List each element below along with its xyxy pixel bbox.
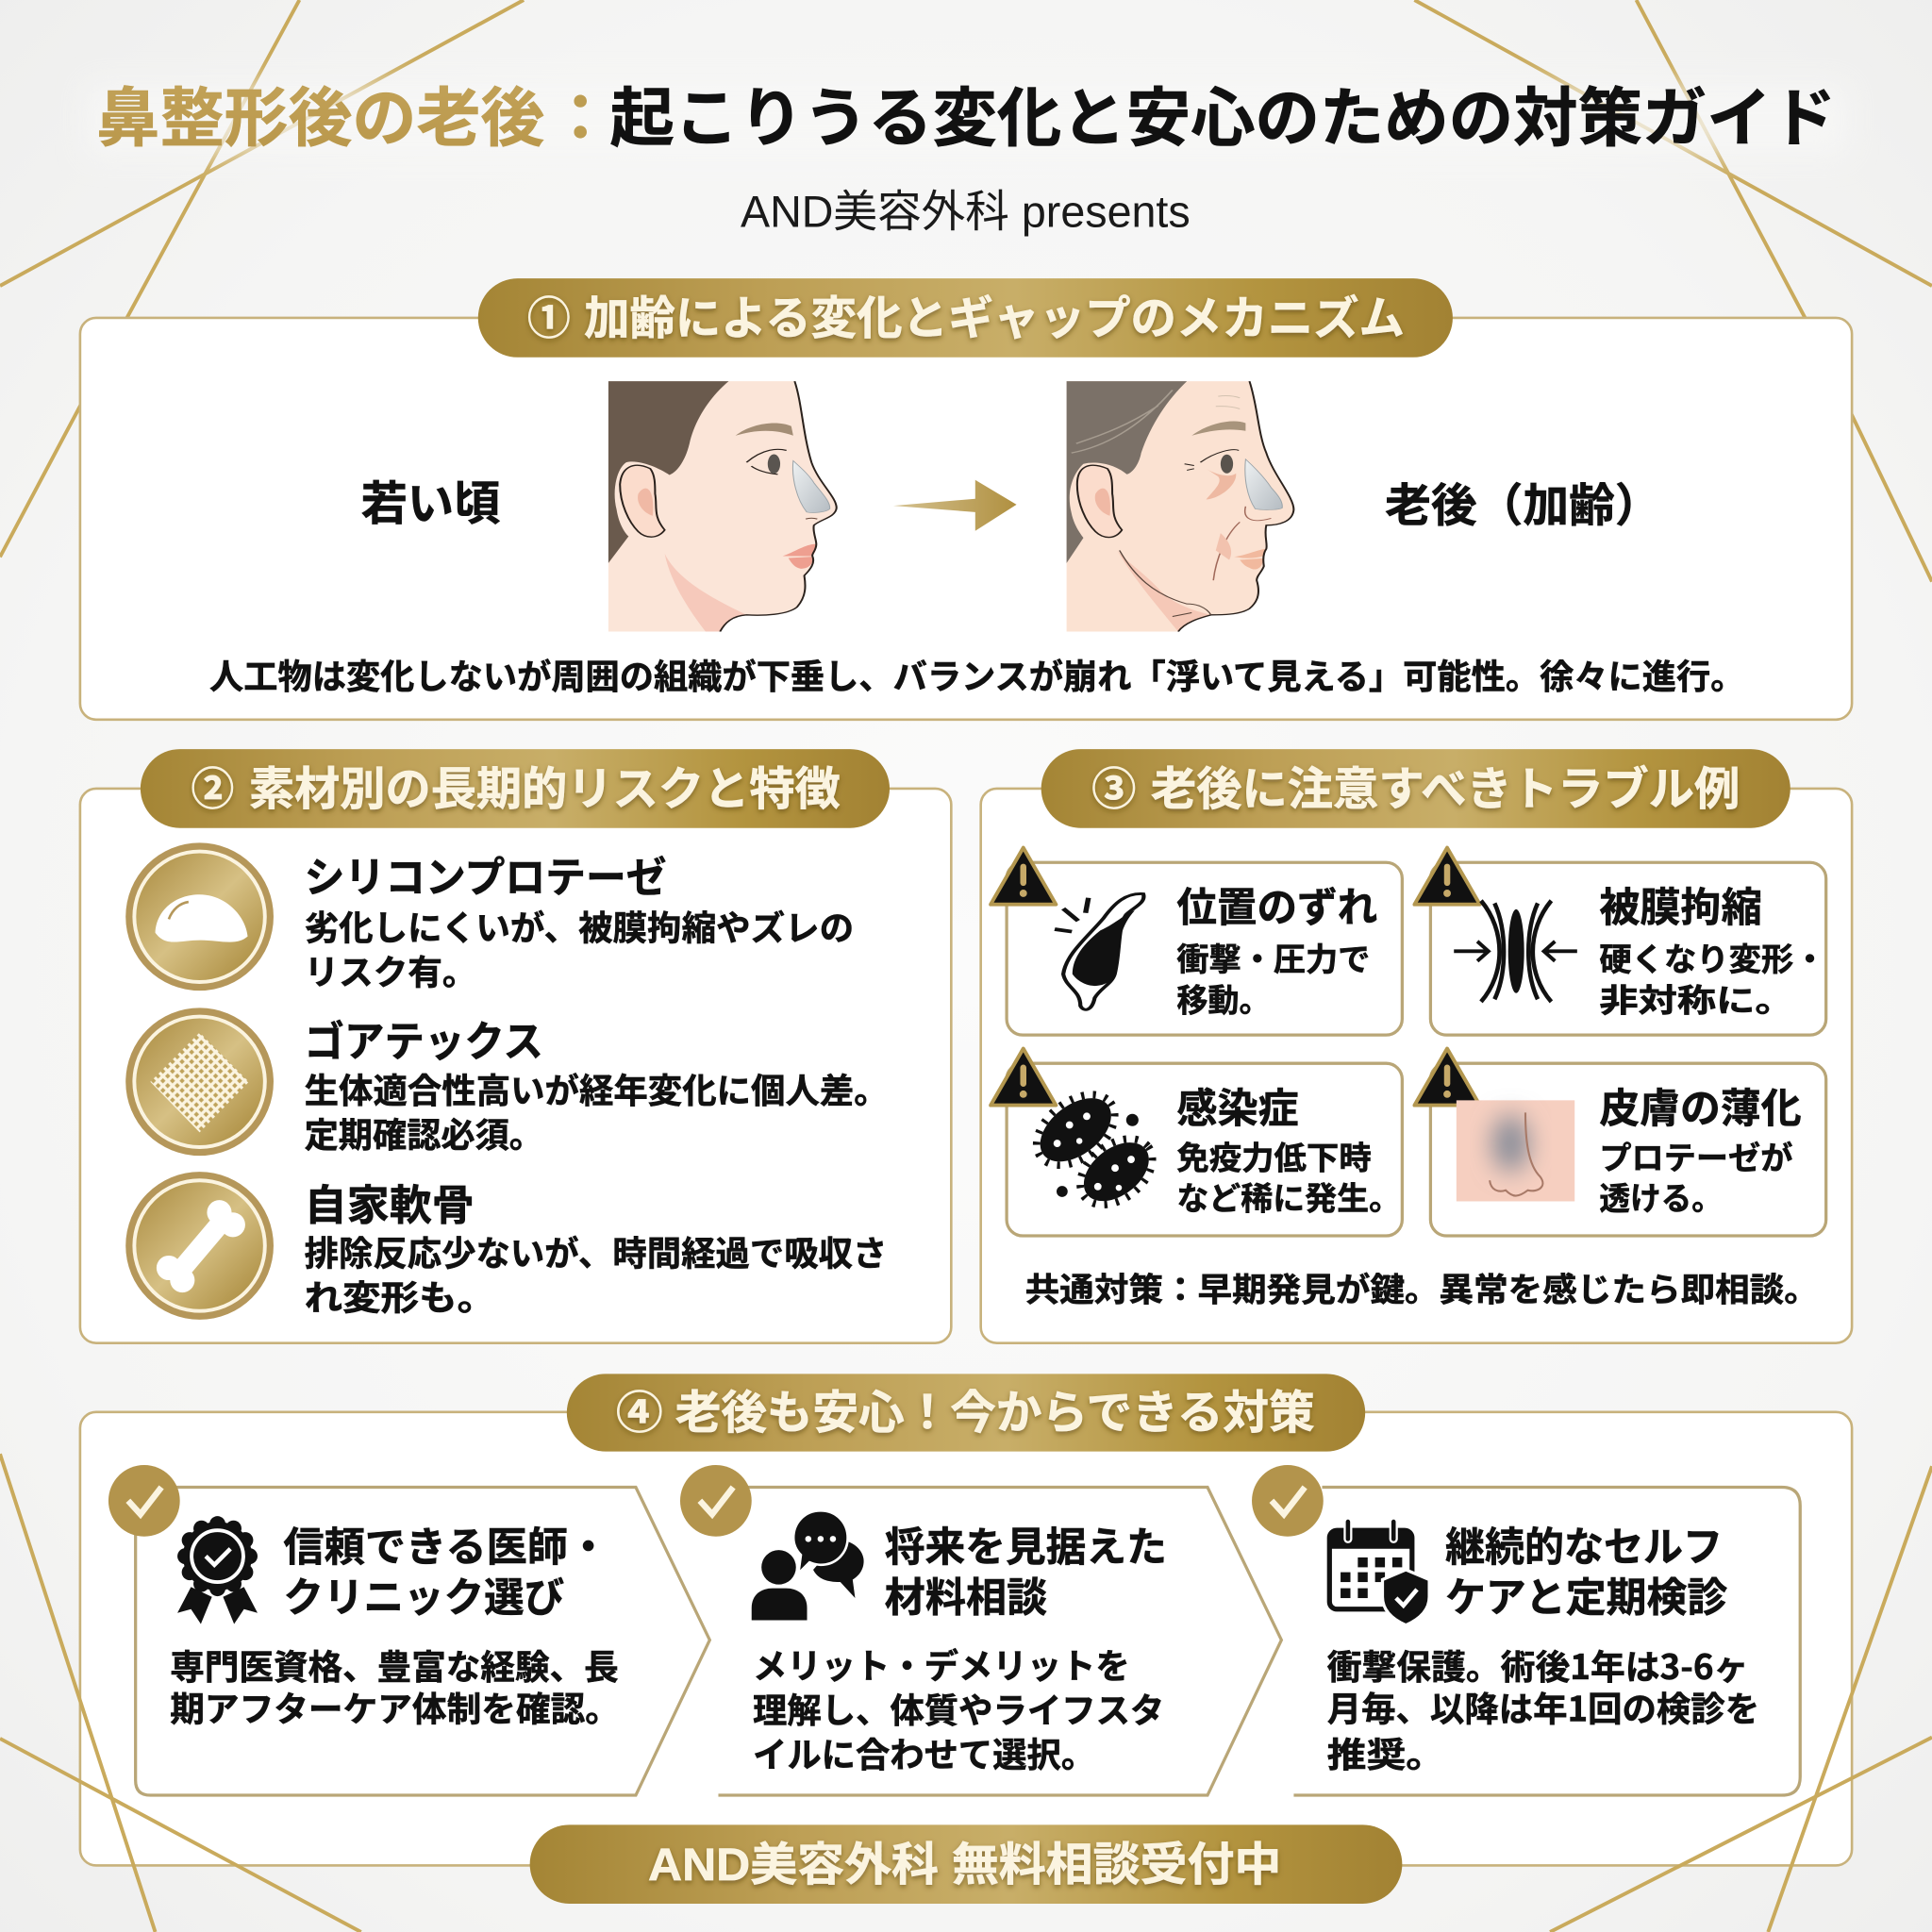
heading pill 3 [1041, 749, 1790, 828]
step card 2 [680, 1465, 1281, 1795]
text [1599, 1076, 1802, 1220]
heading pill 2 [141, 749, 890, 828]
text: など稀に発生。 [1176, 1174, 1401, 1220]
illustration: aged face [1067, 381, 1293, 632]
text [1327, 1515, 1759, 1777]
text: silicone: リスク有。 [305, 945, 476, 995]
warning icon [991, 1049, 1056, 1106]
text: 推奨。 [1327, 1727, 1445, 1777]
text [1599, 875, 1826, 1021]
text: 非対称に。 [1599, 974, 1794, 1021]
icon: cartilage bone [125, 1172, 274, 1320]
card: capsular contracture [1414, 848, 1826, 1035]
subtitle: AND美容外科 presents [741, 186, 1191, 236]
heading pill 3: ③ [1091, 753, 1136, 818]
icon: silicone implant [125, 842, 274, 991]
icon: gore-tex mesh [125, 1008, 274, 1156]
text: 硬くなり変形・ [1599, 934, 1826, 980]
text: 理解し、体質やライフスタ [753, 1683, 1164, 1733]
text: プロテーゼが [1599, 1133, 1792, 1179]
title: ： [548, 66, 612, 159]
gold geometric lines [0, 0, 1932, 581]
text: イルに合わせて選択。 [753, 1727, 1095, 1777]
text: autologous cartilage: 排除反応少ないが、時間経過で吸収さ [305, 1225, 887, 1275]
text: 将来を見据えた [885, 1515, 1167, 1574]
icon: skin with visible implant [1457, 1100, 1574, 1201]
check badge [680, 1465, 752, 1537]
title: 鼻整形後の老後 [96, 66, 544, 159]
footer call to action pill [530, 1824, 1402, 1904]
check badge [108, 1465, 180, 1537]
text: 位置のずれ [1176, 875, 1377, 934]
icon: contracture [1454, 901, 1577, 1002]
text: 免疫力低下時 [1176, 1133, 1372, 1179]
warning icon [991, 848, 1056, 905]
text: 透ける。 [1599, 1174, 1723, 1220]
panel 4: countermeasures [80, 1374, 1852, 1865]
text: silicone: シリコンプロテーゼ [305, 843, 667, 905]
text: 移動。 [1176, 974, 1271, 1021]
common countermeasure: 共通対策：早期発見が鍵。異常を感じたら即相談。 [1025, 1263, 1819, 1311]
heading pill 3: 老後に注意すべきトラブル例 [1151, 752, 1740, 818]
text: autologous cartilage [305, 1171, 887, 1320]
panel 2: materials [80, 749, 951, 1343]
text [753, 1515, 1167, 1777]
warning icon [1414, 1049, 1480, 1106]
description 1: 人工物は変化しないが周囲の組織が下垂し、バランスが崩れ「浮いて見える」可能性。徐々に進行。 [209, 649, 1744, 699]
panel 1: aging mechanism [80, 278, 1852, 720]
text: 継続的なセルフ [1445, 1515, 1723, 1574]
icon: consultation [752, 1510, 864, 1621]
check badge [1252, 1465, 1324, 1537]
step card 3 [1252, 1465, 1800, 1795]
icon: calendar and shield [1329, 1522, 1429, 1625]
heading pill 4 [567, 1374, 1365, 1452]
text: 専門医資格、豊富な経験、長 [170, 1640, 619, 1690]
text: gore-tex: 定期確認必須。 [305, 1108, 543, 1158]
title [96, 66, 1836, 159]
text [1176, 875, 1377, 1021]
text: 衝撃・圧力で [1176, 934, 1370, 980]
heading pill 2: 素材別の長期的リスクと特徴 [249, 752, 841, 818]
text: 皮膚の薄化 [1599, 1076, 1802, 1135]
title: 起こりうる変化と安心のための対策ガイド [610, 66, 1836, 159]
text: gore-tex: 生体適合性高いが経年変化に個人差。 [305, 1063, 889, 1113]
heading pill 1: 加齢による変化とギャップのメカニズム [584, 281, 1405, 347]
arrow [893, 480, 1017, 531]
text: gore-tex [305, 1007, 889, 1158]
step card 1 [108, 1465, 709, 1795]
card: displacement [991, 848, 1402, 1035]
icon: bacteria [1024, 1080, 1165, 1218]
label: aged: 老後（加齢） [1385, 468, 1661, 534]
illustration: young face [608, 381, 837, 632]
text: autologous cartilage: 自家軟骨 [305, 1171, 475, 1232]
text: ケアと定期検診 [1445, 1565, 1727, 1624]
icon: shifted implant [1055, 893, 1143, 1009]
icon: rosette [177, 1516, 258, 1624]
text: autologous cartilage: れ変形も。 [305, 1270, 495, 1320]
warning icon [1414, 848, 1480, 905]
text: 被膜拘縮 [1599, 875, 1762, 934]
card: skin thinning [1414, 1049, 1826, 1236]
heading pill 4: ④ [616, 1376, 663, 1441]
text: 材料相談 [885, 1565, 1047, 1624]
text: 期アフターケア体制を確認。 [170, 1682, 620, 1732]
text: メリット・デメリットを [753, 1639, 1130, 1689]
card: infection [991, 1049, 1402, 1236]
footer call to action pill: AND美容外科 無料相談受付中 [648, 1840, 1281, 1890]
text: 感染症 [1176, 1076, 1299, 1135]
text: 信頼できる医師・ [283, 1515, 608, 1574]
text: 月毎、以降は年1回の検診を [1327, 1682, 1759, 1732]
text: クリニック選び [283, 1565, 564, 1624]
text: gore-tex: ゴアテックス [305, 1007, 543, 1068]
text: 衝撃保護。術後1年は3-6ヶ [1327, 1640, 1748, 1690]
text [1176, 1076, 1401, 1220]
heading pill 4: 老後も安心！今からできる対策 [675, 1375, 1315, 1441]
panel 3: troubles [981, 749, 1852, 1343]
text: silicone: 劣化しにくいが、被膜拘縮やズレの [305, 901, 854, 951]
lower gold lines over panel [0, 1454, 1932, 1932]
heading pill 1: ① [527, 282, 571, 347]
label: young: 若い頃 [361, 466, 501, 534]
heading pill 2: ② [191, 753, 234, 818]
text [170, 1515, 620, 1732]
text: silicone [305, 843, 854, 995]
